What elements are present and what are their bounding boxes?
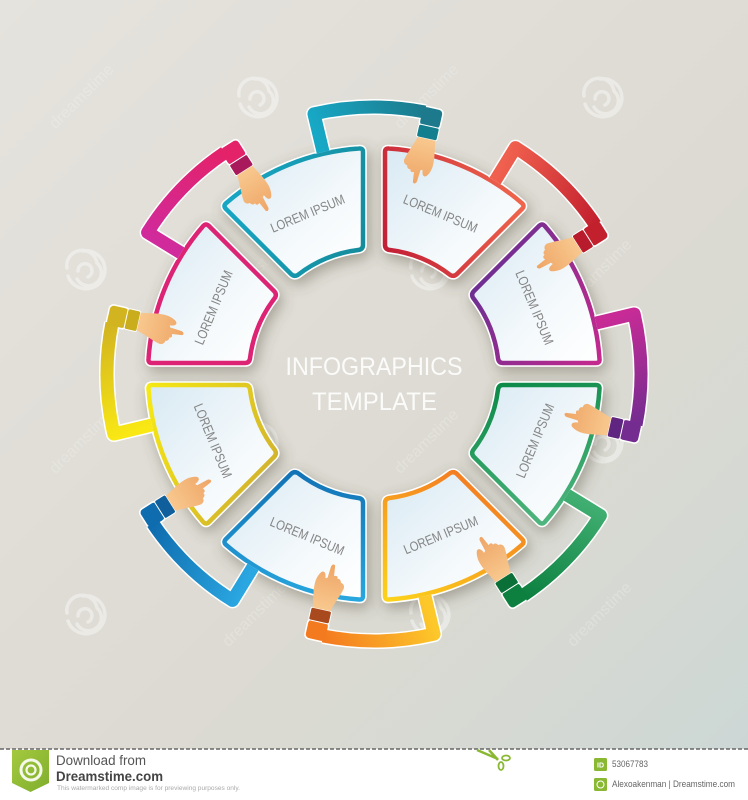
icon: scissors	[477, 750, 510, 770]
card: orange	[385, 472, 524, 600]
arm and hand: blue	[137, 468, 253, 600]
watermark text: dreamstime	[564, 236, 635, 307]
card: blue	[224, 472, 363, 600]
arm and hand: orange	[273, 526, 449, 702]
arm and hand: teal	[299, 46, 475, 222]
watermark text: dreamstime	[391, 61, 462, 132]
arm and hand: magenta	[148, 137, 280, 253]
footer band	[0, 749, 748, 800]
card: red	[385, 148, 524, 276]
watermark text: dreamstime	[46, 61, 117, 132]
card: purple	[472, 224, 600, 363]
card: yellow: LOREM IPSUM	[191, 401, 235, 480]
watermark text: dreamstime	[564, 579, 635, 650]
card: teal	[224, 148, 363, 276]
card: purple: LOREM IPSUM	[512, 268, 556, 347]
footer text: Download from	[56, 753, 146, 768]
title: INFOGRAPHICS	[286, 353, 462, 381]
card: teal: LOREM IPSUM	[268, 192, 347, 236]
image id: ID	[597, 762, 604, 770]
author credit	[594, 778, 735, 791]
arm and hand: yellow	[46, 273, 222, 449]
card: magenta: LOREM IPSUM	[192, 268, 236, 347]
card: green	[472, 385, 600, 524]
watermark text: dreamstime	[219, 236, 290, 307]
title: TEMPLATE	[312, 388, 437, 416]
watermark spirals	[67, 78, 622, 634]
arm and hand: green	[468, 495, 600, 611]
watermark text: dreamstime	[219, 579, 290, 650]
icon: dreamstime badge	[12, 750, 49, 792]
card: yellow	[148, 385, 276, 524]
arm and hand: red	[495, 148, 611, 280]
footer text	[56, 753, 240, 792]
footer text: Dreamstime.com	[56, 768, 163, 784]
watermark text: dreamstime	[391, 406, 462, 477]
arm and hand: purple	[526, 299, 702, 475]
watermark text: dreamstime	[46, 406, 117, 477]
card: green: LOREM IPSUM	[513, 401, 557, 480]
title	[286, 353, 462, 416]
card: red: LOREM IPSUM	[401, 192, 480, 236]
card: orange: LOREM IPSUM	[401, 513, 480, 557]
image id: 53067783	[612, 759, 648, 769]
image id	[594, 758, 648, 771]
card: magenta	[148, 224, 276, 363]
watermark text	[46, 61, 635, 650]
footer text: This watermarked comp image is for previewing purposes only.	[57, 785, 240, 792]
card: blue: LOREM IPSUM	[268, 514, 347, 558]
